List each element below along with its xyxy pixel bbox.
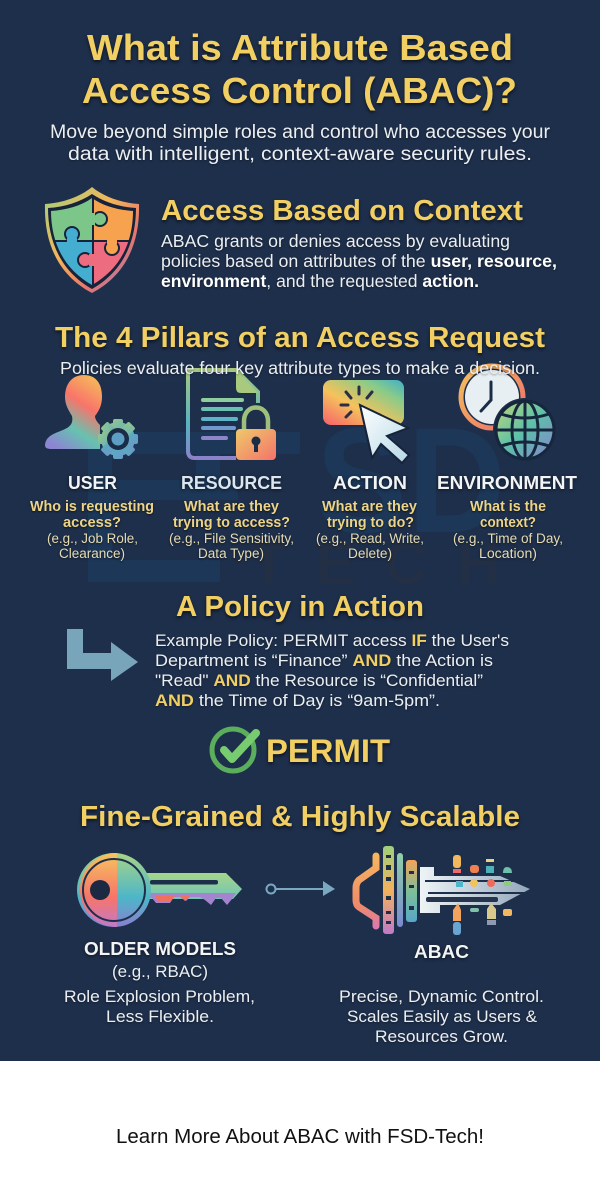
pillar: environment: ENVIRONMENT bbox=[437, 473, 577, 493]
icon: policy arrow bbox=[67, 629, 138, 681]
pillar: environment: What is the bbox=[470, 499, 546, 515]
text block: ABAC description: environment, and the requested action. bbox=[161, 271, 479, 291]
title bbox=[82, 27, 517, 111]
pillar: environment: Location) bbox=[479, 546, 537, 561]
pillar: user: Who is requesting bbox=[30, 499, 154, 515]
text block: example policy: Department is “Finance” AND the Action is bbox=[155, 651, 493, 670]
pillar: resource: What are they bbox=[184, 499, 279, 515]
pillar: environment: context? bbox=[480, 515, 536, 531]
subtitle: Move beyond simple roles and control who accesses your bbox=[50, 122, 551, 143]
caption: older models: OLDER MODELS bbox=[84, 939, 236, 959]
watermark: FSD Tech logo: TECH bbox=[250, 530, 500, 597]
icon: click button and cursor bbox=[323, 380, 409, 463]
pillar: action: ACTION bbox=[333, 473, 407, 493]
heading: a policy in action: A Policy in Action bbox=[176, 591, 424, 623]
pillar: action: (e.g., Read, Write, bbox=[316, 531, 424, 546]
watermark: FSD Tech logo bbox=[88, 396, 506, 597]
permit label: PERMIT bbox=[266, 733, 390, 769]
caption: ABAC: Resources Grow. bbox=[375, 1027, 508, 1046]
subtitle: data with intelligent, context-aware security rules. bbox=[68, 144, 532, 165]
watermark: FSD Tech logo: SD bbox=[316, 396, 506, 564]
shield quadrant: pink bbox=[94, 242, 128, 284]
title: What is Attribute Based bbox=[87, 27, 513, 68]
caption: ABAC: Precise, Dynamic Control. bbox=[339, 987, 544, 1006]
puzzle tab: orange into pink bbox=[105, 241, 119, 255]
text block: example policy: AND the Time of Day is “9am-5pm”. bbox=[155, 691, 440, 710]
pillar: environment: (e.g., Time of Day, bbox=[453, 531, 563, 546]
pillar: resource: (e.g., File Sensitivity, bbox=[169, 531, 294, 546]
pillar: user bbox=[30, 473, 154, 561]
subtitle bbox=[50, 122, 551, 165]
puzzle tab: blue into green bbox=[65, 227, 79, 241]
caption: ABAC: ABAC bbox=[414, 942, 469, 962]
icon: ABAC key bbox=[356, 846, 530, 935]
caption: older models bbox=[64, 939, 255, 1026]
pillar: user: access? bbox=[63, 515, 121, 531]
text block: ABAC description: policies based on attributes of the user, resource, bbox=[161, 251, 557, 271]
text block: example policy bbox=[155, 631, 509, 710]
puzzle tab: pink into blue bbox=[78, 253, 92, 267]
pillar: resource bbox=[169, 473, 294, 561]
pillar: user: USER bbox=[68, 473, 117, 493]
caption: ABAC bbox=[339, 942, 544, 1046]
caption: ABAC: Scales Easily as Users & bbox=[347, 1007, 538, 1026]
caption: older models: Less Flexible. bbox=[106, 1007, 214, 1026]
heading: access based on context: Access Based on Context bbox=[161, 195, 523, 227]
caption: older models: Role Explosion Problem, bbox=[64, 987, 255, 1006]
text block: ABAC description: ABAC grants or denies access by evaluating bbox=[161, 231, 510, 251]
policies sentence: Policies evaluate four key attribute types to make a decision. bbox=[60, 358, 540, 378]
pillar: action: What are they bbox=[322, 499, 417, 515]
text block: example policy: "Read" AND the Resource is “Confidential” bbox=[155, 671, 483, 690]
pillar: resource: RESOURCE bbox=[181, 473, 282, 493]
icon: document with lock bbox=[188, 370, 276, 460]
icon: puzzle shield bbox=[45, 187, 144, 293]
icon: user with gear bbox=[45, 375, 138, 459]
shield quadrant: green bbox=[51, 198, 92, 240]
heading: fine-grained and scalable: Fine-Grained & Highly Scalable bbox=[80, 801, 520, 833]
pillar: resource: Data Type) bbox=[198, 546, 264, 561]
icon: older key bbox=[77, 853, 242, 927]
caption: older models: (e.g., RBAC) bbox=[112, 962, 208, 981]
pillar: user: (e.g., Job Role, bbox=[47, 531, 138, 546]
puzzle tab: green into orange bbox=[93, 212, 107, 226]
pillar: action bbox=[316, 473, 424, 561]
pillar: action: Delete) bbox=[348, 546, 392, 561]
icon: clock and globe bbox=[461, 366, 557, 462]
arrow: older to ABAC bbox=[266, 881, 335, 896]
heading: 4 pillars: The 4 Pillars of an Access Request bbox=[55, 322, 545, 354]
pillar: resource: trying to access? bbox=[173, 515, 290, 531]
footer call to action: Learn More About ABAC with FSD-Tech! bbox=[116, 1126, 484, 1148]
title: Access Control (ABAC)? bbox=[82, 70, 517, 111]
pillar: environment bbox=[437, 473, 577, 561]
text block: ABAC description bbox=[161, 231, 557, 291]
icon: permit check mark bbox=[212, 729, 256, 771]
text block: example policy: Example Policy: PERMIT access IF the User's bbox=[155, 631, 509, 650]
shield quadrant: orange bbox=[94, 199, 133, 240]
pillar: action: trying to do? bbox=[327, 515, 414, 531]
pillar: user: Clearance) bbox=[59, 546, 125, 561]
shield quadrant: blue bbox=[56, 242, 92, 285]
